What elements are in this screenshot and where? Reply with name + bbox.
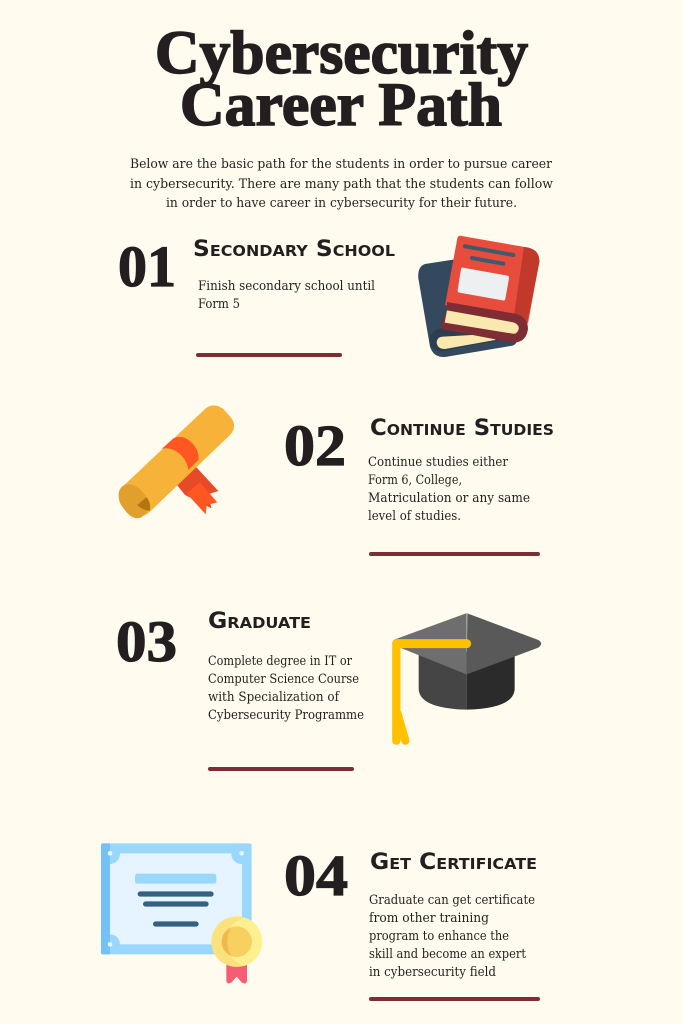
title: Career Path	[180, 72, 502, 139]
icon: books	[418, 236, 539, 357]
text: continue studies: level of studies.	[368, 509, 461, 524]
intro text: Below are the basic path for the students in order to pursue career	[130, 157, 553, 172]
text: get certificate: skill and become an expert	[369, 947, 527, 962]
text: get certificate: in cybersecurity field	[369, 965, 496, 980]
number 02: 02	[284, 413, 346, 478]
heading: continue studies: Continue Studies	[370, 416, 554, 441]
text: secondary school: Form 5	[198, 297, 240, 312]
intro text: in cybersecurity. There are many path that the students can follow	[130, 177, 553, 192]
number 03: 03	[116, 609, 177, 674]
step 3	[116, 609, 541, 771]
text: graduate: Cybersecurity Programme	[208, 708, 364, 723]
text: continue studies: Continue studies either	[368, 455, 509, 470]
divider 4	[369, 997, 540, 1001]
step 4	[101, 843, 540, 1001]
text: graduate	[208, 654, 364, 723]
text: get certificate: program to enhance the	[369, 929, 509, 944]
text: continue studies: Form 6, College,	[368, 473, 462, 488]
intro text	[130, 157, 553, 211]
text: graduate: Computer Science Course	[208, 672, 359, 687]
text: get certificate: Graduate can get certificate	[369, 893, 535, 908]
title: Cybersecurity	[155, 20, 528, 87]
icon: graduation cap	[392, 613, 541, 741]
text: continue studies	[368, 455, 530, 524]
number 04: 04	[284, 843, 348, 908]
icon: diploma scroll	[119, 405, 234, 518]
icon: certificate	[101, 843, 262, 984]
text: secondary school: Finish secondary school until	[198, 279, 375, 294]
text: graduate: with Specialization of	[208, 690, 340, 705]
heading: graduate: Graduate	[208, 609, 311, 634]
text: secondary school	[198, 279, 375, 312]
divider 2	[369, 552, 540, 556]
text: graduate: Complete degree in IT or	[208, 654, 353, 669]
number 01: 01	[118, 234, 176, 299]
title	[155, 20, 528, 139]
heading: secondary school: Secondary School	[193, 237, 395, 262]
text: get certificate	[369, 893, 535, 980]
text: continue studies: Matriculation or any same	[368, 491, 530, 506]
text: get certificate: from other training	[369, 911, 489, 926]
step 2	[119, 405, 554, 556]
step 1	[118, 234, 539, 357]
intro text: in order to have career in cybersecurity for their future.	[166, 196, 517, 211]
divider 1	[196, 353, 342, 357]
divider 3	[208, 767, 354, 771]
heading: get certificate: Get Certificate	[370, 850, 537, 875]
